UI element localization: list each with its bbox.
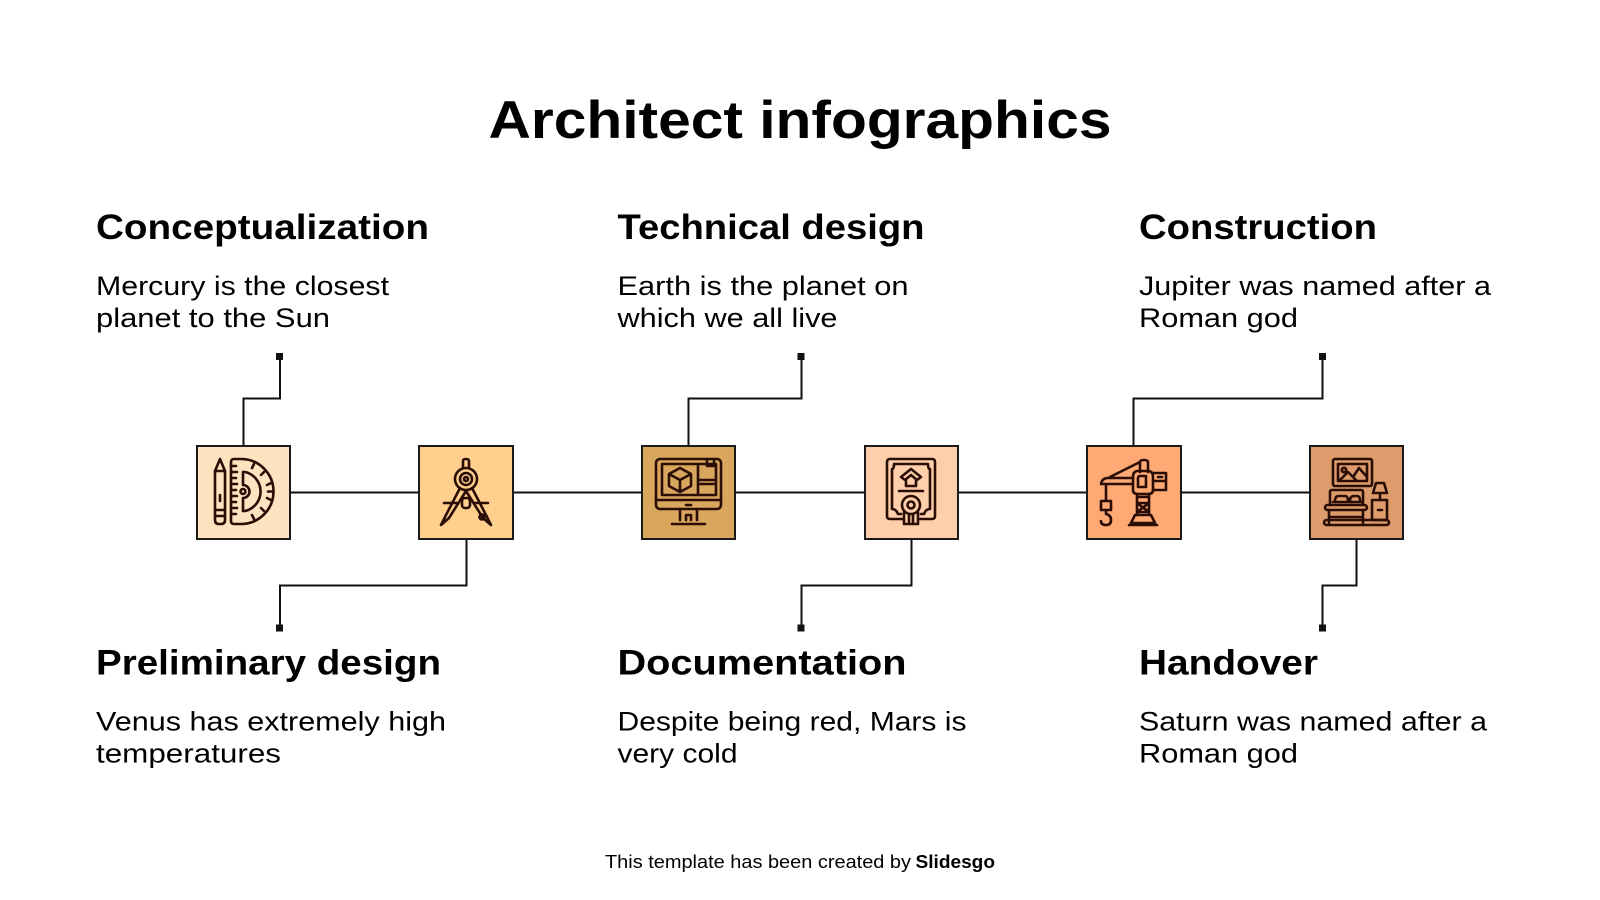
text: handover description <box>1139 706 1488 768</box>
connector lines <box>244 356 1356 628</box>
panel: preliminary design <box>96 644 446 768</box>
text: construction description <box>1139 271 1492 333</box>
text: technical design description: Earth is the planet on <box>618 271 908 301</box>
icon: bedroom <box>1310 446 1403 539</box>
heading: construction: Construction <box>1139 208 1377 247</box>
panel: conceptualization <box>96 208 429 333</box>
panel: construction <box>1139 208 1492 333</box>
heading: conceptualization: Conceptualization <box>96 208 429 247</box>
text: preliminary design description: Venus has extremely high <box>96 706 446 736</box>
footer credit: Slidesgo <box>916 851 995 872</box>
text: conceptualization description <box>96 271 390 333</box>
icon: drafting compass <box>419 446 513 539</box>
panel: technical design <box>616 208 924 333</box>
text: preliminary design description <box>96 706 446 768</box>
text: preliminary design description: temperatures <box>96 738 281 768</box>
text: conceptualization description: Mercury is the closest <box>96 271 390 301</box>
panel: documentation <box>618 644 966 768</box>
text: conceptualization description: planet to the Sun <box>96 303 330 333</box>
text: technical design description <box>616 271 908 333</box>
title: Architect infographics <box>488 91 1112 150</box>
icon: tower crane <box>1087 446 1181 539</box>
footer credit: This template has been created by <box>605 851 912 872</box>
icon: architectural certificate <box>865 446 958 539</box>
text: documentation description: very cold <box>618 738 738 768</box>
heading: handover: Handover <box>1139 644 1318 682</box>
panel: handover <box>1139 644 1488 768</box>
text: construction description: Jupiter was named after a <box>1139 271 1492 301</box>
text: technical design description: which we all live <box>616 303 838 333</box>
text: handover description: Roman god <box>1139 738 1298 768</box>
heading: documentation: Documentation <box>618 644 906 682</box>
icon: computer with 3D cube <box>642 446 735 539</box>
icon: pencil and protractor <box>197 446 290 539</box>
text: documentation description: Despite being red, Mars is <box>618 706 966 736</box>
heading: preliminary design: Preliminary design <box>96 644 441 682</box>
connector end squares <box>276 353 1326 632</box>
heading: technical design: Technical design <box>618 208 924 247</box>
text: documentation description <box>618 706 966 768</box>
text: handover description: Saturn was named after a <box>1139 706 1488 736</box>
text: construction description: Roman god <box>1139 303 1298 333</box>
